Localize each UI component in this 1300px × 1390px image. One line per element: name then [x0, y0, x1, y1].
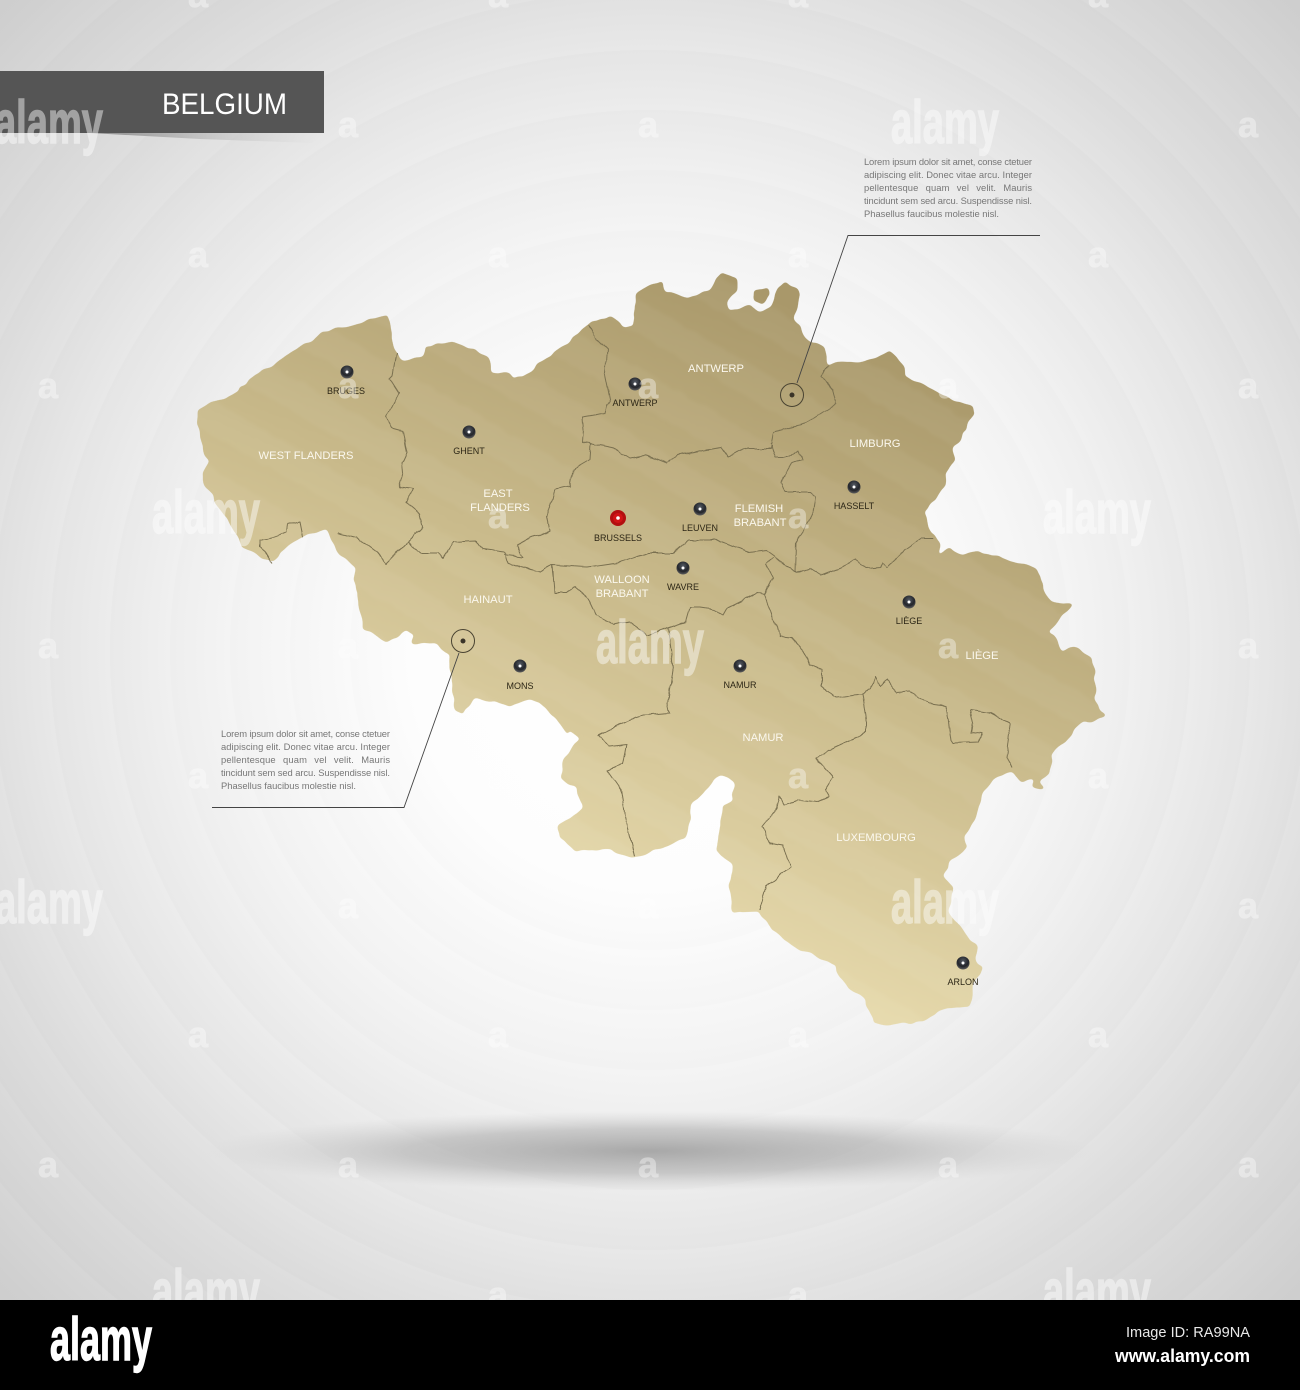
province labels: NAMUR	[742, 732, 784, 744]
callout text: adipiscing elit. Donec vitae arcu. Integer	[864, 169, 1032, 180]
alamy watermarks: a	[1238, 625, 1259, 666]
alamy watermarks: a	[488, 755, 509, 796]
alamy watermarks: a	[788, 755, 809, 796]
province labels: LUXEMBOURG	[836, 832, 916, 844]
alamy watermarks: alamy	[596, 609, 704, 676]
alamy watermarks: a	[338, 1144, 359, 1185]
alamy watermarks: a	[488, 495, 509, 536]
callout marker	[452, 630, 474, 652]
alamy watermarks: a	[638, 885, 659, 926]
pin: Leuven: LEUVEN	[682, 523, 718, 533]
callout text: Phasellus faucibus molestie nisl.	[221, 780, 356, 791]
floating map shadow	[205, 1111, 1095, 1191]
province labels: FLEMISH	[735, 503, 783, 515]
alamy watermarks: a	[638, 104, 659, 145]
alamy watermarks: a	[1088, 755, 1109, 796]
province labels: LIÈGE	[966, 649, 998, 662]
alamy watermarks: a	[1238, 1144, 1259, 1185]
province labels: HAINAUT	[463, 594, 513, 606]
province labels: FLANDERS	[470, 502, 530, 514]
banner bar	[0, 71, 324, 133]
callout: top right	[780, 156, 1040, 406]
alamy watermarks: a	[1238, 104, 1259, 145]
pin: Arlon: ARLON	[947, 977, 979, 987]
province labels	[259, 363, 998, 844]
alamy watermarks: a	[188, 234, 209, 275]
website: www.alamy.com	[1114, 1346, 1250, 1366]
callout: bottom left	[212, 630, 474, 808]
province labels: LIMBURG	[850, 438, 900, 450]
province labels: BRABANT	[734, 517, 787, 529]
alamy watermarks: a	[788, 234, 809, 275]
pin: Mons	[506, 660, 534, 691]
callout text: tincidunt sem sed arcu. Suspendisse nisl.	[221, 767, 390, 778]
alamy watermarks: alamy	[891, 89, 999, 156]
callout text: adipiscing elit. Donec vitae arcu. Integer	[221, 741, 390, 752]
pin: Wavre	[667, 562, 699, 592]
callout text: tincidunt sem sed arcu. Suspendisse nisl.	[864, 195, 1032, 206]
alamy watermarks: a	[1088, 1014, 1109, 1055]
alamy watermarks: a	[38, 365, 59, 406]
banner wedge shadow	[90, 133, 324, 143]
alamy watermarks: a	[788, 1014, 809, 1055]
alamy watermarks: a	[38, 1144, 59, 1185]
alamy watermarks: a	[488, 1014, 509, 1055]
pin: Mons: MONS	[506, 681, 534, 691]
map of Belgium	[196, 273, 1105, 1025]
footer logo: alamy	[50, 1306, 152, 1373]
alamy watermarks: a	[1238, 365, 1259, 406]
alamy watermarks: alamy	[1043, 1258, 1151, 1325]
callout text	[864, 156, 1032, 219]
alamy watermarks: a	[1238, 885, 1259, 926]
alamy watermarks: a	[1088, 234, 1109, 275]
image id: Image ID: RA99NA	[1126, 1324, 1250, 1341]
alamy watermarks: a	[638, 365, 659, 406]
alamy watermarks: a	[938, 1144, 959, 1185]
pin: Bruges: BRUGES	[327, 386, 365, 396]
alamy watermarks: alamy	[891, 869, 999, 936]
alamy watermarks: a	[338, 104, 359, 145]
callout text: pellentesque quam vel velit. Mauris	[221, 754, 390, 765]
pin: Namur	[724, 660, 757, 690]
footer background	[0, 1300, 1300, 1390]
pin: Namur: NAMUR	[724, 680, 757, 690]
alamy watermarks: a	[188, 1014, 209, 1055]
province labels: EAST	[483, 488, 513, 500]
callout text: Phasellus faucibus molestie nisl.	[864, 208, 999, 219]
title: BELGIUM	[162, 88, 287, 121]
pin: Brussels capital	[594, 510, 642, 543]
pin: Brussels capital: BRUSSELS	[594, 533, 642, 543]
province labels: WEST FLANDERS	[259, 450, 353, 462]
alamy watermarks: alamy	[152, 479, 260, 546]
pin: Ghent: GHENT	[453, 446, 485, 456]
alamy watermarks: alamy	[1043, 479, 1151, 546]
pin: Bruges	[327, 366, 365, 396]
alamy watermarks: a	[188, 755, 209, 796]
pin: Liège	[896, 596, 922, 626]
title banner	[0, 71, 324, 143]
pin: Leuven	[682, 502, 718, 533]
pin: Wavre: WAVRE	[667, 582, 699, 592]
province labels: BRABANT	[596, 588, 649, 600]
callout text: Lorem ipsum dolor sit amet, conse ctetuer	[221, 728, 390, 739]
callout marker	[780, 384, 804, 406]
pin: Antwerp	[612, 378, 658, 408]
city markers	[327, 366, 979, 987]
callout text: Lorem ipsum dolor sit amet, conse ctetuer	[864, 156, 1032, 167]
alamy watermarks: alamy	[152, 1258, 260, 1325]
province labels: ANTWERP	[688, 363, 744, 375]
pin: Ghent	[453, 426, 485, 456]
pin: Liège: LIÈGE	[896, 616, 922, 626]
alamy watermarks: a	[938, 365, 959, 406]
leader line	[212, 653, 459, 808]
alamy watermarks: a	[338, 625, 359, 666]
alamy watermarks: a	[938, 625, 959, 666]
province borders	[260, 325, 1012, 910]
footer strip	[0, 1300, 1300, 1390]
leader line	[797, 236, 1040, 383]
pin: Hasselt: HASSELT	[834, 501, 875, 511]
country shape	[196, 273, 1105, 1025]
alamy watermarks: a	[488, 1274, 509, 1315]
alamy watermarks: alamy	[0, 869, 103, 936]
alamy watermarks: a	[788, 495, 809, 536]
alamy watermarks: alamy	[0, 89, 103, 156]
province labels: WALLOON	[594, 574, 650, 586]
alamy watermarks: a	[488, 234, 509, 275]
alamy watermarks: a	[788, 1274, 809, 1315]
alamy watermarks: a	[338, 885, 359, 926]
callout text: pellentesque quam vel velit. Mauris	[864, 182, 1032, 193]
alamy watermarks: a	[338, 365, 359, 406]
pin: Antwerp: ANTWERP	[612, 398, 658, 408]
alamy watermarks: a	[638, 1144, 659, 1185]
alamy watermarks: a	[38, 625, 59, 666]
callout text	[221, 728, 390, 791]
pin: Hasselt	[834, 480, 875, 511]
pin: Arlon	[947, 956, 979, 987]
